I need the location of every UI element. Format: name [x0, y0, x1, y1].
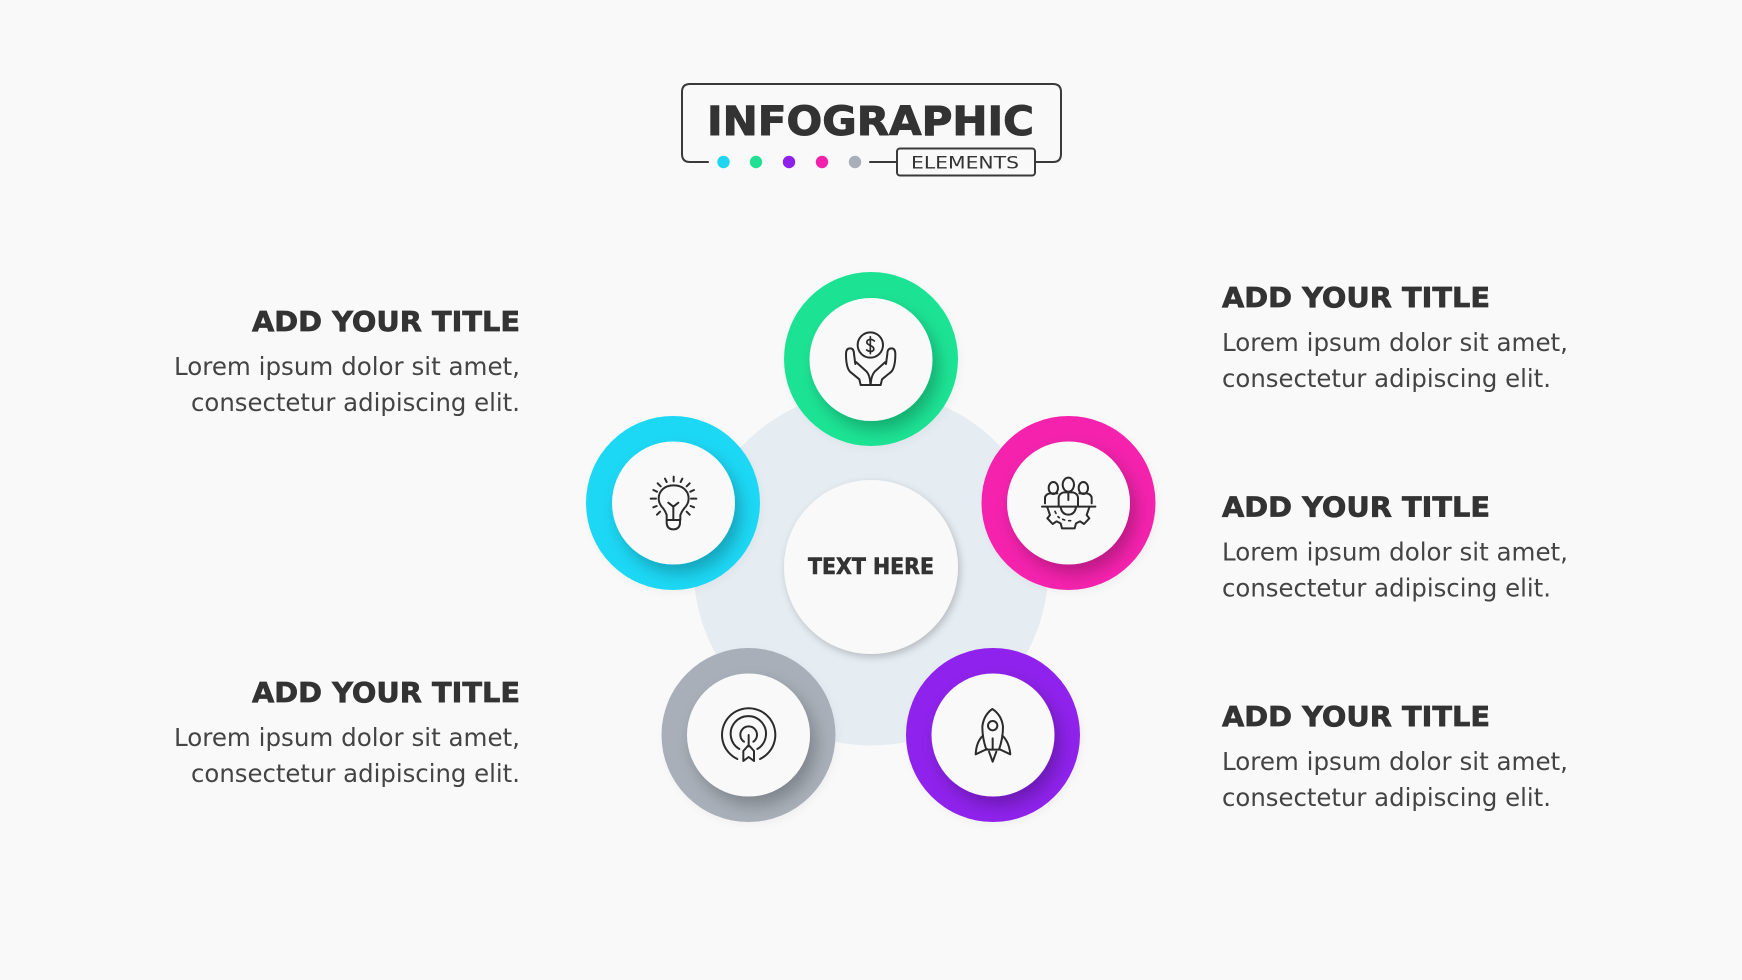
text block: middle right: consectetur adipiscing elit. [1222, 574, 1551, 602]
text block: bottom right: Lorem ipsum dolor sit amet, [1222, 747, 1568, 776]
text block: middle right: Lorem ipsum dolor sit amet, [1222, 538, 1568, 566]
title badge [682, 84, 1061, 176]
text block: top left: Lorem ipsum dolor sit amet, [174, 352, 520, 381]
center circle [784, 480, 958, 654]
ring: grey, target icon [662, 648, 836, 822]
text block: bottom left: consectetur adipiscing elit. [191, 759, 520, 788]
text block: bottom left: ADD YOUR TITLE [252, 677, 520, 709]
pale central circle [694, 390, 1048, 746]
ring: cyan, idea icon [586, 416, 760, 590]
heading: infographic: INFOGRAPHIC [707, 99, 1034, 145]
ring: magenta, team icon [982, 416, 1156, 590]
text block: top right: consectetur adipiscing elit. [1222, 364, 1551, 393]
icon: team and gear [1042, 478, 1095, 528]
text block: bottom right [1222, 701, 1568, 812]
badge frame [682, 84, 1061, 162]
text block: middle right: ADD YOUR TITLE [1222, 492, 1490, 524]
text block: bottom right: ADD YOUR TITLE [1222, 701, 1490, 733]
infographic canvas [176, 83, 1566, 822]
icon: hands holding coin [846, 332, 895, 385]
elements tag: ELEMENTS [911, 154, 1019, 174]
center circle: TEXT HERE [808, 555, 934, 580]
legend dots [717, 156, 861, 168]
text block: top left [174, 306, 520, 417]
text block: bottom right: consectetur adipiscing elit. [1222, 783, 1551, 812]
text block: top right: ADD YOUR TITLE [1222, 282, 1490, 314]
text block: top left: consectetur adipiscing elit. [191, 388, 520, 417]
text block: bottom left: Lorem ipsum dolor sit amet, [174, 723, 520, 752]
text block: middle right [1222, 492, 1568, 602]
icon: light bulb [651, 477, 696, 529]
text block: bottom left [174, 677, 520, 788]
elements tag [897, 148, 1035, 176]
icon: rocket [976, 709, 1010, 762]
icon: target with arrow [722, 708, 775, 761]
ring: green, money icon [784, 272, 958, 446]
ring: purple, rocket icon [906, 648, 1080, 822]
text block: top right: Lorem ipsum dolor sit amet, [1222, 328, 1568, 357]
text block: top left: ADD YOUR TITLE [252, 306, 520, 338]
text block: top right [1222, 282, 1568, 393]
